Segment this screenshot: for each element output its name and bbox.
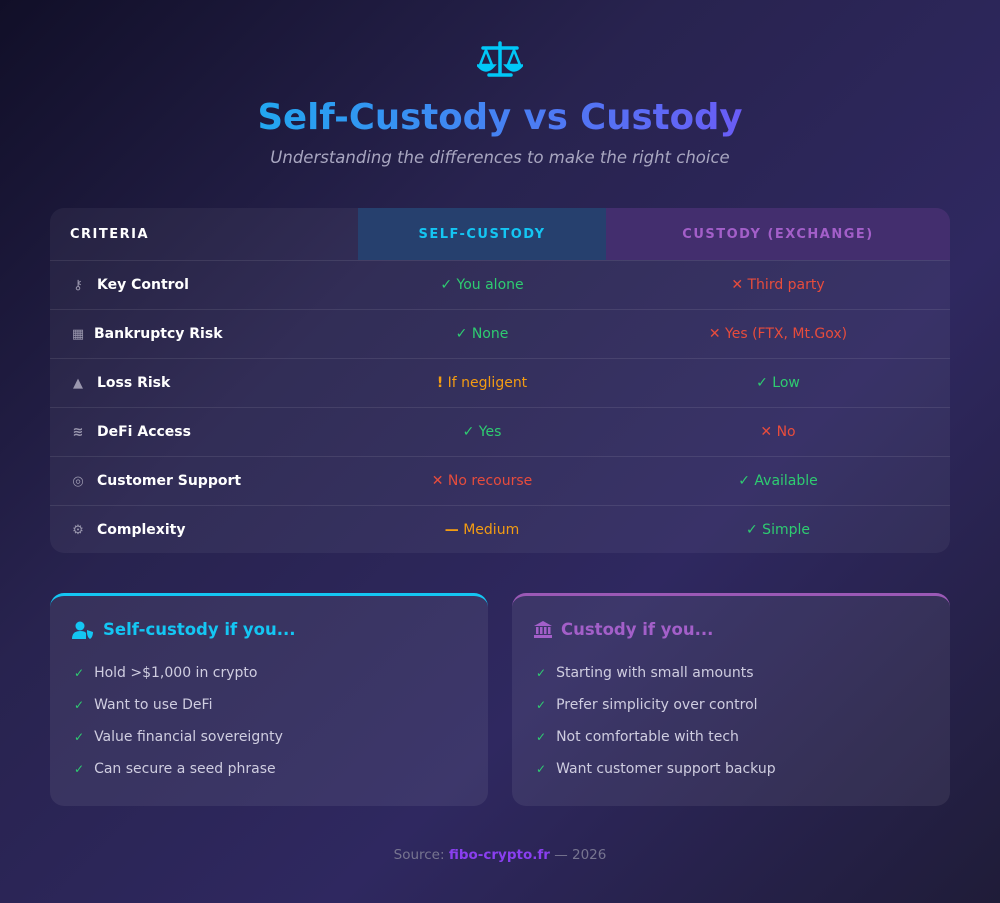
row: key control: ✓ You alone: [440, 277, 524, 293]
icon: scales: [477, 41, 523, 77]
row: complexity: — Medium: [445, 522, 519, 538]
card heading: Custody if you...: [561, 620, 713, 639]
row: key control: [50, 260, 950, 309]
row: bankruptcy: Bankruptcy Risk: [94, 326, 223, 342]
row: complexity: ⚙: [72, 523, 84, 538]
card list: ✓ Value financial sovereignty: [74, 729, 283, 745]
row: defi: DeFi Access: [97, 424, 191, 440]
card list: ✓ Want to use DeFi: [74, 697, 212, 713]
card list: ✓ Hold >$1,000 in crypto: [74, 665, 257, 681]
row: support: [50, 456, 950, 505]
card: custody: [512, 593, 950, 806]
title: Self-Custody vs Custody: [257, 97, 743, 138]
row: bankruptcy: ✕ Yes (FTX, Mt.Gox): [709, 326, 847, 342]
row: loss risk: ▲: [73, 376, 83, 391]
row: defi: ✕ No: [760, 424, 796, 440]
card list: ✓ Starting with small amounts: [536, 665, 754, 681]
row: support: ✕ No recourse: [432, 473, 532, 489]
row: loss risk: Loss Risk: [97, 375, 170, 391]
row: loss risk: ! If negligent: [437, 375, 527, 391]
row: loss risk: [50, 358, 950, 407]
row: bankruptcy: [50, 309, 950, 358]
row: support: Customer Support: [97, 473, 241, 489]
row: complexity: ✓ Simple: [746, 522, 810, 538]
row: support: ✓ Available: [738, 473, 818, 489]
card list: ✓ Can secure a seed phrase: [74, 761, 276, 777]
row: defi: [50, 407, 950, 456]
card: self-custody: [50, 593, 488, 806]
table header: CRITERIA: [70, 226, 149, 242]
row: defi: ≋: [73, 425, 83, 440]
row: key control: Key Control: [97, 277, 189, 293]
table header: CUSTODY (EXCHANGE): [682, 226, 874, 242]
card heading: Self-custody if you...: [103, 620, 296, 639]
row: defi: ✓ Yes: [463, 424, 501, 440]
row: key control: ✕ Third party: [731, 277, 825, 293]
row: key control: ⚷: [73, 278, 83, 293]
row: bankruptcy: ✓ None: [456, 326, 508, 342]
row: loss risk: ✓ Low: [756, 375, 800, 391]
comparison table: [50, 208, 950, 553]
card list: [536, 665, 776, 777]
card list: ✓ Not comfortable with tech: [536, 729, 739, 745]
subtitle: Understanding the differences to make the right choice: [270, 148, 730, 167]
row: support: ◎: [72, 474, 84, 489]
row: complexity: Complexity: [97, 522, 185, 538]
row: complexity: [50, 505, 950, 554]
table header: [70, 208, 950, 260]
card list: ✓ Prefer simplicity over control: [536, 697, 758, 713]
table header: SELF-CUSTODY: [418, 226, 546, 242]
row: bankruptcy: ▦: [72, 327, 84, 342]
card list: [74, 665, 283, 777]
footer source: Source: fibo-crypto.fr — 2026: [394, 847, 606, 863]
card list: ✓ Want customer support backup: [536, 761, 776, 777]
